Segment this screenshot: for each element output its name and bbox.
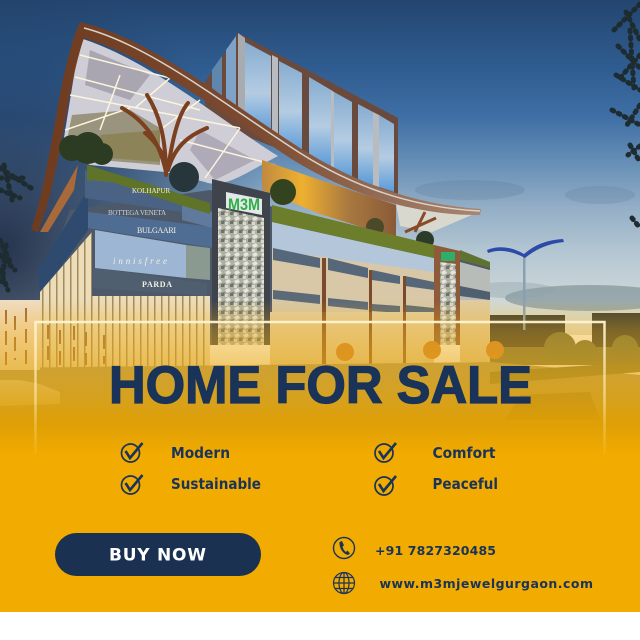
roof glazed underside xyxy=(62,38,278,184)
phone number: +91 7827320485 xyxy=(375,543,496,558)
tree-shaped column xyxy=(122,95,207,175)
feature: Sustainable xyxy=(122,475,261,494)
shop sign labels: BOTTEGA VENETA xyxy=(108,209,166,217)
right facade xyxy=(272,222,490,348)
feature: Comfort xyxy=(375,443,496,462)
lower floors xyxy=(92,296,490,368)
feature list xyxy=(122,443,498,495)
feature: Sustainable: Sustainable xyxy=(171,475,261,493)
shop sign labels: PARDA xyxy=(142,280,172,289)
shop sign labels: BULGAARI xyxy=(137,226,176,235)
feature: Comfort: Comfort xyxy=(432,444,496,462)
shop sign labels: KOLHAPUR xyxy=(132,187,170,195)
sky xyxy=(0,0,640,335)
ground and road xyxy=(0,300,640,455)
buy now button xyxy=(55,533,261,576)
title: HOME FOR SALE xyxy=(109,356,532,415)
glass tower xyxy=(205,33,398,196)
website: www.m3mjewelgurgaon.com xyxy=(380,576,593,591)
photo: shopping complex at dusk xyxy=(0,0,640,455)
icon: phone xyxy=(334,538,354,558)
curved roof band xyxy=(31,22,481,232)
M3M sign tower: M3M xyxy=(228,195,260,214)
feature: Peaceful xyxy=(375,475,498,495)
icon: globe xyxy=(334,572,354,594)
shop sign bands xyxy=(85,170,213,296)
feature: Modern xyxy=(122,443,230,462)
feature: Peaceful: Peaceful xyxy=(432,475,498,493)
M3M sign tower xyxy=(212,179,270,345)
solid yellow panel xyxy=(0,454,640,612)
yellow gradient overlay xyxy=(0,300,640,455)
podium facade xyxy=(38,190,490,370)
street lamp xyxy=(487,239,564,330)
second M3M sign xyxy=(434,245,460,345)
shop sign labels xyxy=(108,187,176,289)
translucent frame xyxy=(36,322,604,454)
distant buildings xyxy=(487,313,640,347)
feature: Modern: Modern xyxy=(171,444,230,462)
amber canopy and wall xyxy=(262,160,481,238)
shop sign labels: innisfree xyxy=(113,256,167,266)
buy now button: BUY NOW xyxy=(109,546,206,566)
planters and greenery xyxy=(59,132,490,268)
trees at the edges xyxy=(0,4,640,290)
